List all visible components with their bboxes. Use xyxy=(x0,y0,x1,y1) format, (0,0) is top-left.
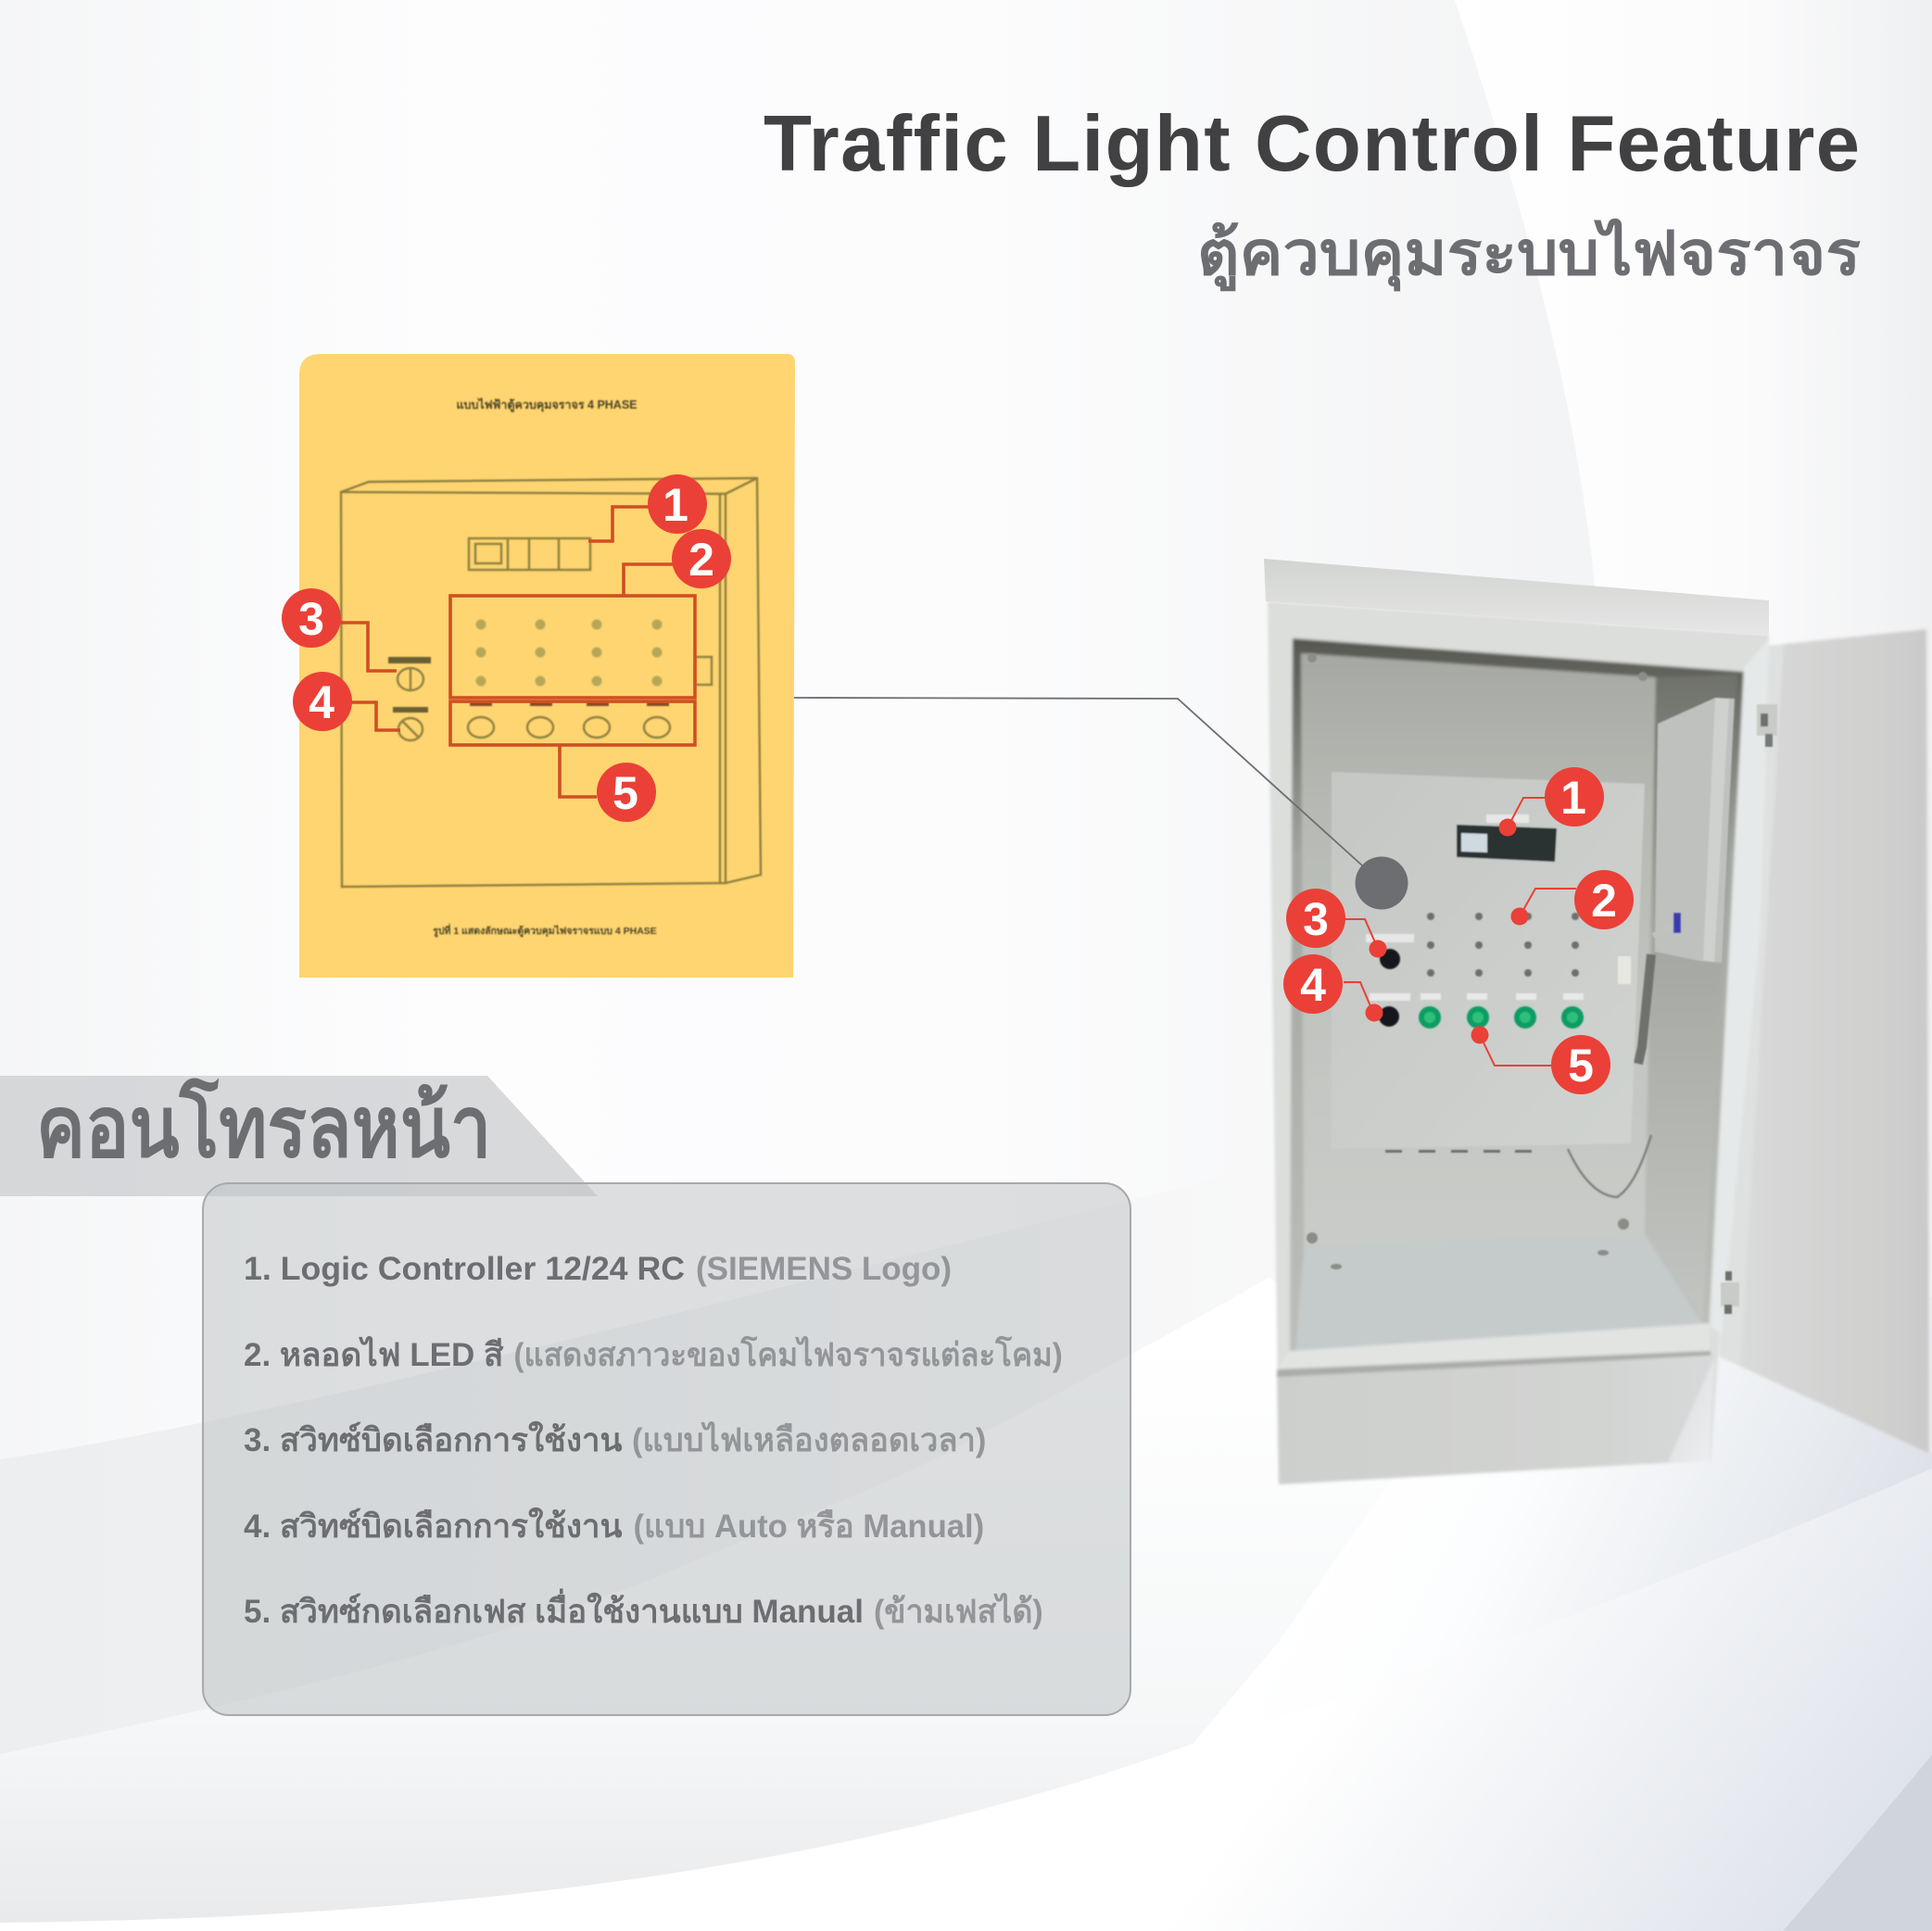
list item 3: (แบบไฟเหลืองตลอดเวลา) xyxy=(632,1420,986,1458)
list item 4: 4. สวิทซ์บิดเลือกการใช้งาน xyxy=(244,1507,623,1545)
section heading tab xyxy=(0,1076,598,1196)
section heading text: คอนโทรลหน้า xyxy=(36,1078,491,1175)
panel: yellow wiring diagram xyxy=(282,354,795,978)
roof xyxy=(1264,559,1769,635)
photo badge 4 xyxy=(1283,954,1343,1014)
black selector knobs xyxy=(1379,949,1400,1027)
diagram caption top: แบบไฟฟ้าตู้ควบคุมจราจร 4 PHASE xyxy=(456,398,638,412)
list item 5: (ข้ามเฟสได้) xyxy=(874,1593,1043,1630)
list item 2: 2. หลอดไฟ LED สี xyxy=(244,1335,504,1373)
diagram badge 2 xyxy=(672,529,731,588)
list item 2: (แสดงสภาวะของโคมไฟจราจรแต่ละโคม) xyxy=(513,1335,1063,1373)
photo badge 2: 2 xyxy=(1591,875,1617,927)
diagram badge 2: 2 xyxy=(688,534,714,586)
photo badge 5: 5 xyxy=(1568,1040,1594,1092)
photo pointer dots xyxy=(1366,819,1529,1043)
photo leader lines xyxy=(1344,798,1576,1066)
panel wiring xyxy=(1568,1135,1651,1197)
red highlight boxes and leaders xyxy=(339,507,695,797)
photo badge 1: 1 xyxy=(1560,772,1586,824)
mounting screws xyxy=(1307,653,1648,1269)
open door xyxy=(1719,629,1932,1454)
hinges xyxy=(1721,704,1777,1314)
connector end dot xyxy=(1355,856,1408,910)
photo badge 5 xyxy=(1551,1035,1610,1094)
diagram caption bottom: รูปที่ 1 แสดงลักษณะตู้ควบคุมไฟจราจรแบบ 4 PHASE xyxy=(433,923,657,938)
indicator LEDs xyxy=(1427,913,1579,977)
list item 4 xyxy=(244,1507,984,1545)
green push buttons xyxy=(1419,1006,1584,1029)
diagram badge 5: 5 xyxy=(612,767,638,819)
diagram drawing xyxy=(341,478,761,887)
photo badge 3 xyxy=(1286,889,1345,948)
diagram badge 3 xyxy=(282,588,341,648)
diagram badge 3: 3 xyxy=(298,593,324,645)
title: Traffic Light Control Feature xyxy=(764,100,1860,188)
list item 1: 1. Logic Controller 12/24 RC xyxy=(244,1251,685,1287)
list item 5 xyxy=(244,1588,1043,1630)
control panel xyxy=(1332,772,1645,1153)
diagram badge 1: 1 xyxy=(663,479,688,531)
photo badge 2 xyxy=(1574,870,1634,929)
cabinet photo xyxy=(1264,559,1932,1484)
diagram badge 1 xyxy=(648,474,707,534)
list item 1: (SIEMENS Logo) xyxy=(696,1251,952,1287)
side junction box xyxy=(1638,698,1735,1064)
list item 3 xyxy=(244,1420,986,1458)
panel: component list xyxy=(203,1183,1130,1715)
photo badge 1 xyxy=(1545,767,1604,827)
yellow card xyxy=(299,354,795,978)
list item 4: (แบบ Auto หรือ Manual) xyxy=(634,1508,984,1545)
list item 5: 5. สวิทซ์กดเลือกเฟส เมื่อใช้งานแบบ Manual xyxy=(244,1588,864,1630)
diagram badge 4 xyxy=(293,672,352,731)
diagram badge 5 xyxy=(597,763,656,822)
diagram badge 4: 4 xyxy=(309,676,335,728)
list item 3: 3. สวิทซ์บิดเลือกการใช้งาน xyxy=(244,1420,623,1458)
subtitle: ตู้ควบคุมระบบไฟจราจร xyxy=(1197,218,1861,292)
photo badge 3: 3 xyxy=(1303,893,1329,945)
LED grid on diagram xyxy=(388,619,669,713)
list item 2 xyxy=(244,1335,1063,1373)
list item 1 xyxy=(244,1251,952,1287)
photo badge 4: 4 xyxy=(1300,959,1326,1011)
cabinet body xyxy=(1268,601,1769,1484)
connector line from diagram to cabinet xyxy=(794,698,1362,865)
